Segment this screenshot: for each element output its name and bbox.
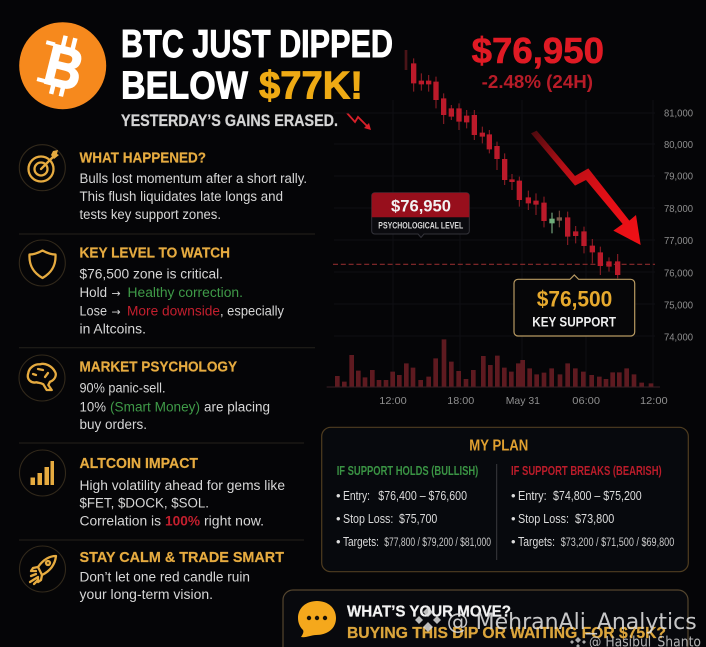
body text [80, 478, 285, 529]
body text: 100% [165, 514, 200, 529]
current price: $76,950 [472, 30, 604, 71]
title [121, 23, 393, 108]
body text: your long-term vision. [80, 587, 213, 602]
body text: tests key support zones. [80, 207, 221, 222]
support dashed line [333, 263, 655, 265]
current price [472, 30, 604, 92]
time axis: 06:00 [572, 395, 600, 407]
body text: Healthy correction. [128, 285, 243, 300]
candlesticks [406, 50, 618, 278]
bearish plan: • [511, 534, 516, 549]
bullish plan: Entry: [343, 488, 370, 503]
answer text: BUYING THIS DIP OR WAITING FOR $75K? [347, 625, 666, 642]
body text: This flush liquidates late longs and [80, 189, 283, 204]
callout: key support: KEY SUPPORT [532, 314, 616, 330]
price axis: 74,000 [664, 332, 693, 344]
body text [80, 380, 270, 432]
heading: WHAT HAPPENED? [80, 150, 206, 166]
time axis: May 31 [506, 395, 540, 407]
bearish plan: Entry: [518, 488, 547, 503]
panel: key level to watch [19, 240, 284, 336]
body text [80, 570, 250, 602]
price axis: 76,000 [664, 268, 693, 280]
price axis: 78,000 [664, 203, 693, 215]
arrow: big red down arrow [531, 131, 641, 245]
body text: $76,500 zone is critical. [80, 266, 223, 282]
body text: in Altcoins. [80, 322, 146, 336]
price axis: 75,000 [664, 300, 693, 312]
panel: altcoin impact [20, 450, 285, 529]
heading: ALTCOIN IMPACT [80, 455, 198, 472]
bullish plan: Stop Loss: [343, 511, 393, 526]
chart grid [334, 100, 655, 387]
icon: speech bubble [298, 601, 336, 637]
watermark: MehranAli Analytics: @ MehranAli_Analytics [447, 610, 697, 635]
question text: WHAT’S YOUR MOVE? [347, 604, 511, 621]
bullish plan: $75,700 [399, 511, 437, 526]
price axis: 81,000 [664, 108, 693, 120]
bearish plan: $73,200 / $71,500 / $69,800 [561, 537, 674, 549]
icon: brain [19, 355, 65, 401]
body text: (Smart Money) [110, 400, 200, 414]
body text: Correlation is [80, 514, 161, 529]
callout: key support: $76,500 [537, 287, 612, 312]
icon: bar signal [20, 450, 66, 496]
body text: Bulls lost momentum after a short rally. [80, 171, 307, 186]
bullish plan: • [336, 488, 341, 503]
body text: Don’t let one red candle ruin [80, 570, 250, 585]
panel: my plan [322, 427, 688, 572]
body text: → [112, 287, 121, 300]
body text: right now. [204, 514, 264, 529]
panel: what happened [19, 145, 307, 222]
heading: MY PLAN [469, 438, 528, 455]
callout: key support [514, 275, 635, 336]
title: BTC JUST DIPPED [121, 23, 393, 66]
bullish plan: $77,800 / $79,200 / $81,000 [384, 537, 491, 549]
subtitle: YESTERDAY’S GAINS ERASED. [121, 112, 338, 130]
bearish plan [511, 463, 674, 549]
current price: -2.48% (24H) [482, 72, 593, 92]
icon: bitcoin logo: B [38, 32, 90, 104]
bullish plan: • [336, 511, 341, 526]
bullish plan: Targets: [343, 534, 379, 549]
body text: High volatility ahead for gems like [80, 478, 285, 493]
icon: rocket [20, 546, 66, 592]
icon: small red down arrow [347, 113, 371, 130]
icon: target [19, 145, 65, 191]
bullish plan: $76,400 – $76,600 [378, 488, 467, 503]
body text: 90% panic-sell. [80, 380, 166, 396]
body text: are placing [204, 400, 270, 414]
time axis: 18:00 [447, 395, 474, 407]
price axis: 80,000 [664, 139, 693, 151]
heading: KEY LEVEL TO WATCH [80, 244, 230, 262]
panel: call to action [283, 590, 688, 647]
title: BELOW [121, 64, 248, 108]
body text: buy orders. [80, 417, 147, 432]
title: $77K! [259, 64, 363, 108]
panel: price chart [327, 50, 693, 407]
panel: stay calm [20, 546, 284, 602]
body text [80, 171, 307, 222]
bearish plan: Targets: [518, 534, 555, 549]
bearish plan: • [511, 488, 516, 503]
price axis: 79,000 [664, 170, 693, 182]
bullish plan [336, 463, 491, 549]
body text: Hold [80, 285, 107, 300]
callout: psychological level [372, 193, 469, 238]
heading: STAY CALM & TRADE SMART [80, 549, 284, 566]
body text: , especially [220, 304, 284, 318]
time axis: 12:00 [379, 395, 407, 407]
body text: 10% [80, 400, 106, 414]
price axis: 77,000 [664, 235, 693, 247]
panel: market psychology [19, 355, 270, 432]
bearish plan: $73,800 [575, 511, 614, 526]
heading: MARKET PSYCHOLOGY [80, 359, 237, 376]
callout: psychological level: PSYCHOLOGICAL LEVEL [378, 221, 463, 232]
time axis: 12:00 [640, 395, 668, 407]
callout: psychological level: $76,950 [391, 197, 451, 216]
bearish plan: $74,800 – $75,200 [553, 488, 642, 503]
body text: $FET, $DOCK, $SOL. [80, 496, 209, 511]
body text: → [112, 306, 121, 318]
body text: Lose [80, 304, 107, 318]
icon: shield [19, 240, 65, 286]
bullish plan: IF SUPPORT HOLDS (BULLISH) [337, 463, 478, 478]
price axis [664, 108, 693, 344]
bullish plan: • [336, 534, 341, 549]
bearish plan: • [511, 511, 516, 526]
time axis [379, 395, 668, 407]
bearish plan: Stop Loss: [518, 511, 569, 526]
body text: More downside [127, 304, 220, 318]
icon: bitcoin logo [19, 22, 106, 109]
volume bars [327, 339, 660, 387]
body text [80, 266, 284, 336]
